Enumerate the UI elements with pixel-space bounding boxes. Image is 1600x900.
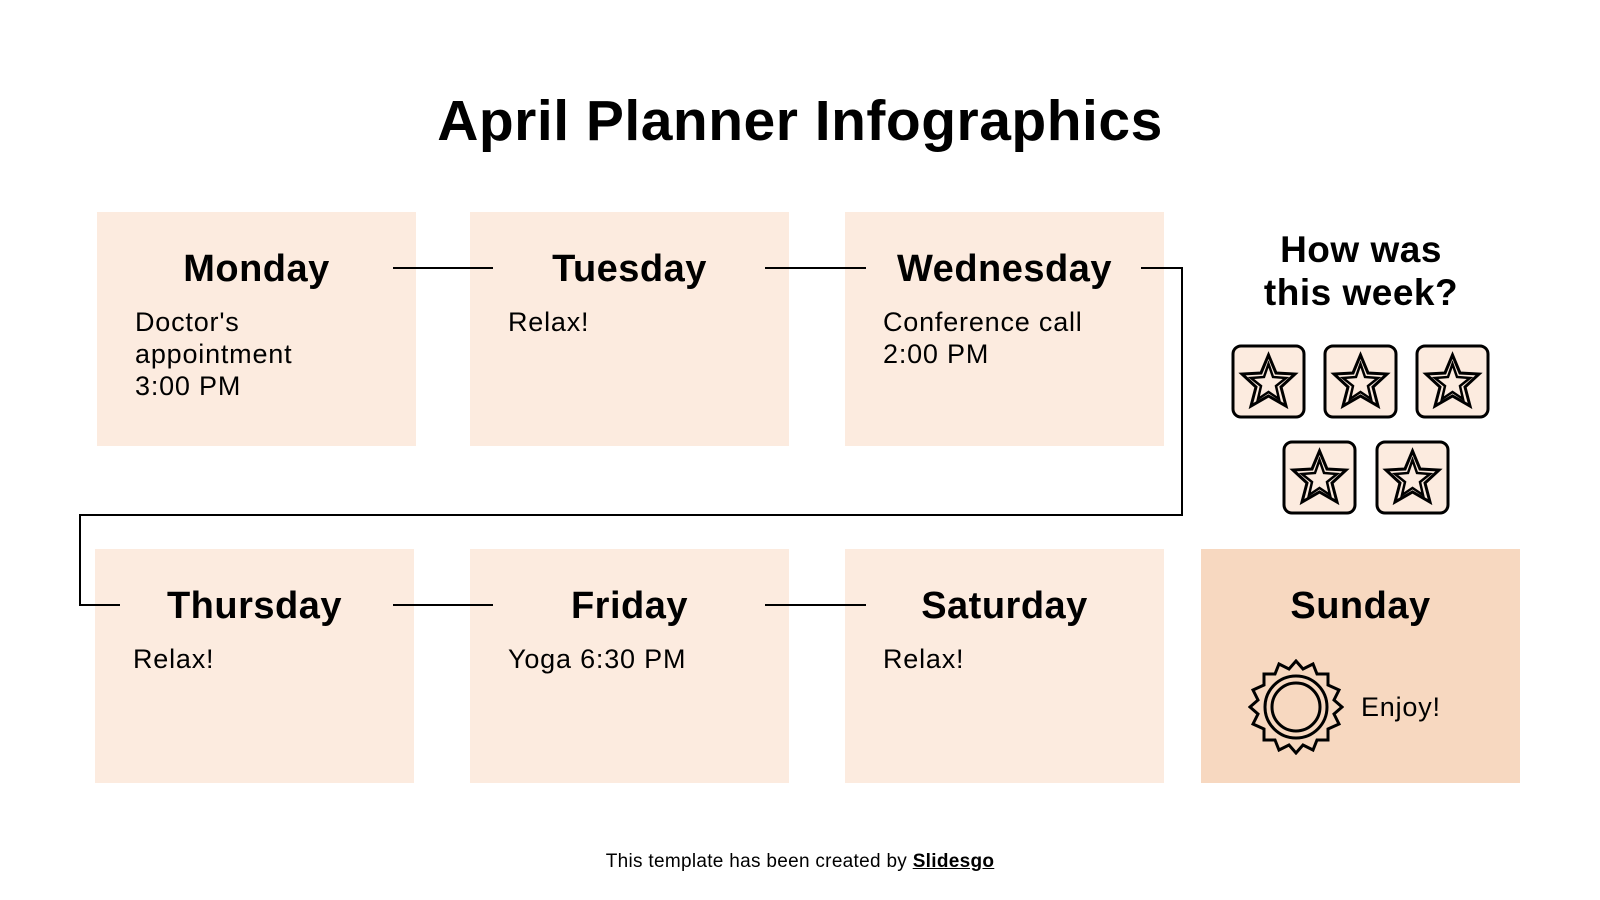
icon: star ratings: [1232, 344, 1490, 514]
panel: Tuesday: Tuesday: [552, 248, 707, 290]
panel: Friday: Friday: [571, 585, 688, 627]
panel: Saturday: Relax!: [883, 644, 964, 674]
panel: Tuesday: [470, 212, 789, 446]
panel: Monday: Doctor's: [135, 307, 240, 337]
panel: Monday: Monday: [183, 248, 330, 290]
panel: Monday: appointment: [135, 339, 292, 369]
panel: Friday: [470, 549, 789, 783]
heading: How was this week: this week?: [1264, 272, 1458, 313]
panel: Monday: 3:00 PM: [135, 371, 241, 401]
heading: How was this week: [1264, 229, 1458, 313]
panel: Thursday: Thursday: [167, 585, 342, 627]
panel: Thursday: [95, 549, 414, 783]
panel: Sunday: [1201, 549, 1520, 783]
panel: Monday: [97, 212, 416, 446]
panel: Tuesday: Relax!: [508, 307, 589, 337]
footer: This template has been created by Slidesgo: [606, 851, 994, 872]
panel: Friday: Yoga 6:30 PM: [508, 644, 686, 674]
panel: Wednesday: 2:00 PM: [883, 339, 989, 369]
panel: Wednesday: Wednesday: [897, 248, 1112, 290]
icon: sun: [1248, 659, 1344, 755]
heading: How was this week: How was: [1280, 229, 1442, 270]
panel: Sunday: Sunday: [1290, 585, 1431, 627]
panel: Saturday: [845, 549, 1164, 783]
panel: Thursday: Relax!: [133, 644, 214, 674]
panel: Wednesday: Conference call: [883, 307, 1083, 337]
panel: Saturday: Saturday: [921, 585, 1088, 627]
panel: Wednesday: [845, 212, 1164, 446]
text: Enjoy: Enjoy!: [1361, 692, 1441, 722]
title: April Planner Infographics: [437, 89, 1163, 153]
